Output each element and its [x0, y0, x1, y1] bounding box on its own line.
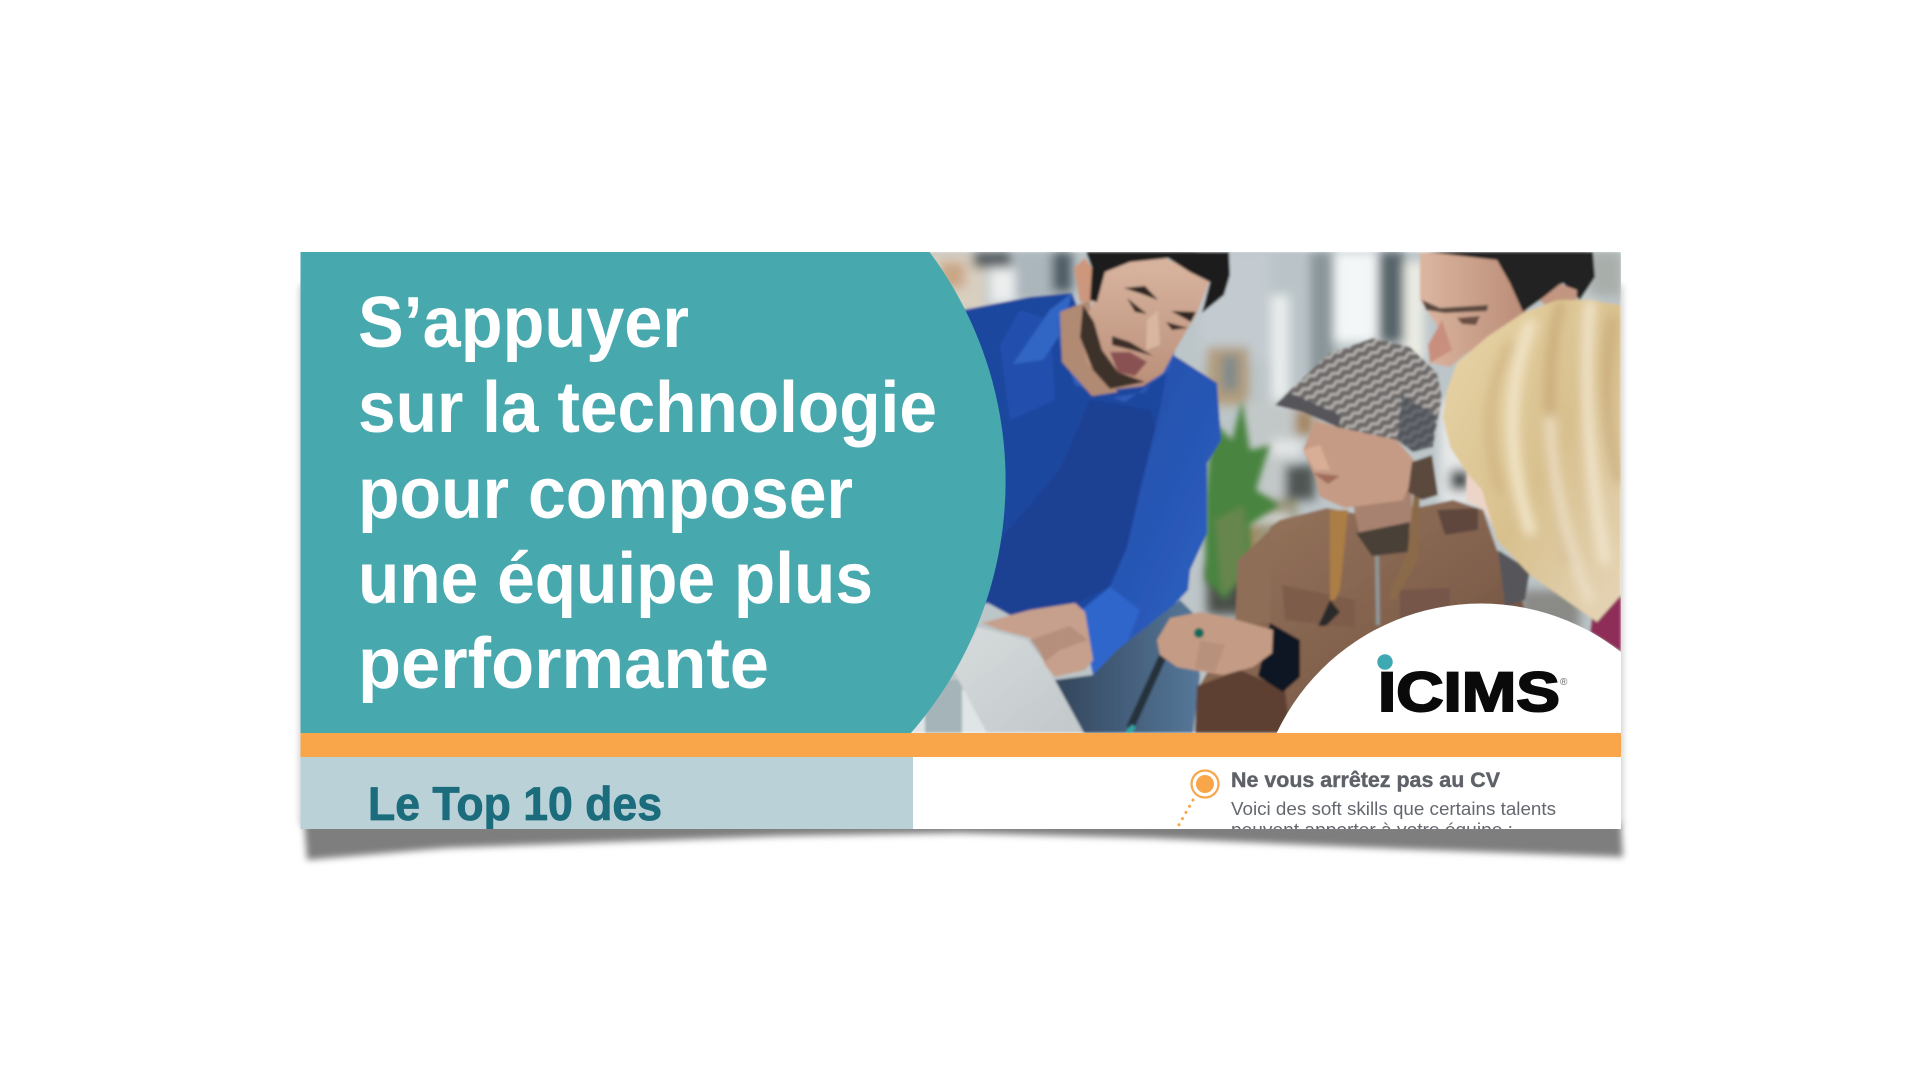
logo badge [1276, 604, 1621, 733]
title: pour composer [358, 454, 853, 534]
card [300, 252, 1621, 829]
hair strands [1490, 305, 1618, 600]
subtitle: Le Top 10 des [368, 777, 662, 830]
beard [1080, 305, 1145, 389]
brows and eyes [1124, 286, 1196, 322]
photo background blurred shop [925, 252, 1621, 630]
photo: jeans [1055, 600, 1200, 733]
hair behind ear [1408, 455, 1438, 500]
body text: Voici des soft skills que certains talents [1231, 799, 1556, 819]
wristband cuff [1258, 623, 1300, 692]
collar [1013, 293, 1072, 364]
teal headline panel [630, 252, 1006, 733]
jacket [1195, 500, 1530, 733]
body text: peuvent apporter à votre équipe : [1231, 820, 1513, 840]
right hand [1157, 612, 1273, 675]
braids [1330, 510, 1348, 600]
neck [1060, 300, 1118, 396]
neck and collar [1352, 487, 1414, 534]
ring [1194, 628, 1204, 638]
subtitle panel [300, 757, 913, 829]
teal panel left fill [300, 252, 335, 733]
title: une équipe plus [358, 539, 873, 619]
glass [925, 680, 962, 733]
photo: man on the right [1420, 252, 1595, 367]
hair [1086, 252, 1230, 313]
photo plant [1205, 400, 1280, 600]
photo: woman with cap [1157, 338, 1530, 733]
photo: blonde woman [1443, 300, 1621, 652]
photo: pen [1128, 656, 1163, 733]
photo: team around a laptop [900, 252, 1621, 733]
shirt front shade [988, 400, 1160, 615]
cap [1275, 338, 1442, 452]
logo: icims: ® [1560, 677, 1568, 688]
mouth [1110, 352, 1147, 376]
photo: left hand [982, 603, 1093, 677]
icon: timeline marker [1176, 770, 1218, 830]
photo: man with blue shirt [964, 252, 1232, 676]
ear [1074, 258, 1093, 302]
face [1080, 257, 1210, 390]
sleeve [1090, 356, 1222, 668]
body text [1231, 799, 1556, 840]
infographic canvas [296, 252, 1628, 864]
title [358, 283, 937, 704]
title: performante [358, 624, 769, 704]
logo: icims: ICIMS [1378, 660, 1560, 723]
photo: laptop [953, 627, 1083, 733]
face [1303, 420, 1418, 508]
card drop shadow [300, 285, 1623, 860]
title: sur la technologie [358, 368, 937, 448]
photo: table [911, 690, 987, 733]
title: S’appuyer [358, 283, 689, 363]
orange band [300, 733, 1621, 757]
section heading: Ne vous arrêtez pas au CV [1231, 769, 1500, 792]
zipper [1377, 556, 1378, 625]
